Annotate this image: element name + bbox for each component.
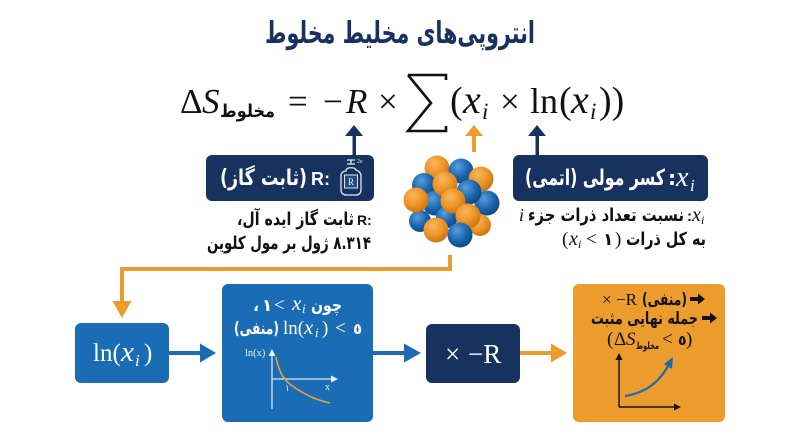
text: ln explanation (234, 291, 362, 340)
text: result: مخلوط (636, 341, 659, 352)
text: R description: ثابت گاز ایده آل، (237, 207, 354, 230)
arrow: particles to formula (465, 125, 483, 152)
label: R gas constant: (ثابت گاز) (220, 164, 307, 191)
formula: × (500, 82, 520, 121)
text: result: جمله نهایی مثبت (591, 309, 698, 329)
label: mole fraction (525, 162, 695, 195)
text: mole fraction description: به کل ذرات (626, 229, 706, 250)
text: R description: R: (357, 212, 372, 228)
formula: x (570, 77, 589, 122)
text: result: < (662, 329, 673, 350)
panel: ln explanation (222, 284, 373, 422)
text: result: Δ (614, 329, 626, 350)
text: ln explanation: ٥ (353, 320, 362, 338)
text: ln explanation: ) (322, 318, 328, 339)
arrow: -R to result (520, 344, 567, 362)
arrow: explanation to -R (373, 344, 421, 362)
formula: مخلوط (220, 101, 275, 122)
text: ln explanation: ln( (283, 318, 304, 339)
formula: Δ (180, 82, 203, 121)
text: mole fraction description: i (701, 213, 704, 227)
chart: rising curve (616, 353, 681, 410)
text: result: (منفی) (642, 290, 687, 310)
label: ln(xi): ln( (93, 340, 121, 367)
formula: i (482, 99, 488, 124)
text: ln explanation: x (303, 315, 314, 339)
text: ln explanation: (منفی) (234, 319, 279, 339)
text: mole fraction description: < (586, 229, 597, 250)
text: ln explanation: < (335, 318, 346, 339)
label: ln(xi): x (120, 336, 134, 368)
label: R gas constant: R: (311, 169, 330, 189)
arrow: xi to formula (528, 125, 546, 156)
icon: gas cylinder: R (348, 177, 354, 187)
text: result (591, 290, 717, 352)
text: mole fraction description: ( (562, 229, 568, 250)
chart: ln curve (245, 348, 338, 409)
formula: = (288, 82, 308, 121)
label: mole fraction: i (690, 176, 695, 195)
text: mole fraction description: i (578, 237, 581, 251)
label: mole fraction: : (668, 166, 676, 190)
label: ln(xi): ) (144, 340, 152, 367)
label: times -R: −R (468, 339, 501, 369)
chart: ln curve: ln(x) (245, 348, 266, 359)
formula: × (378, 82, 398, 121)
formula: i (590, 99, 596, 124)
formula: )) (599, 80, 624, 122)
formula (180, 75, 624, 131)
label: mole fraction: x (675, 162, 689, 193)
chart: ln curve: ۱ (285, 383, 290, 393)
arrow: particles to ln box (112, 255, 450, 318)
formula: S (202, 82, 220, 121)
text: ln explanation: ، (253, 296, 259, 315)
panel: mole fraction (513, 155, 708, 201)
formula: ( (559, 80, 572, 122)
text: mole fraction description: ) (615, 229, 621, 250)
text: result: ٥ (678, 333, 687, 349)
label: ln(xi) (93, 336, 152, 370)
text: mole fraction description: ۱ (603, 230, 613, 250)
text: mole fraction description (519, 204, 706, 251)
text: mole fraction description: i (519, 205, 524, 225)
text: result: ) (686, 329, 692, 350)
text: result: ( (607, 329, 613, 350)
formula: − (323, 82, 343, 121)
text: ln explanation: ۱ (262, 296, 272, 316)
formula: ln (530, 81, 558, 121)
label: mole fraction: کسر مولی (اتمی) (525, 166, 665, 191)
panel: result (573, 284, 725, 422)
panel: ln(xi) box (75, 323, 169, 383)
icon: gas cylinder: 2e (357, 159, 363, 165)
formula: x (462, 77, 481, 122)
title: انتروپی‌های مخلیط مخلوط (265, 16, 535, 51)
text: result: × (602, 290, 612, 309)
arrow: ln to explanation (169, 344, 216, 362)
icon: particle cluster (404, 156, 500, 248)
text: ln explanation: i (302, 301, 306, 316)
panel: gas constant (206, 155, 374, 201)
text: mole fraction description: x (568, 228, 578, 250)
chart: ln curve: x (325, 382, 330, 393)
formula: R (345, 82, 367, 121)
label: times -R (445, 339, 501, 369)
formula: ( (450, 80, 463, 122)
arrow: R to formula (345, 125, 363, 156)
text: ln explanation: i (315, 325, 319, 340)
label: times -R: × (445, 339, 460, 369)
text: mole fraction description: : (687, 208, 692, 225)
text: mole fraction description: نسبت تعداد ذرات جزء (528, 205, 684, 226)
text: result: −R (616, 290, 638, 309)
panel: times -R box (426, 324, 520, 383)
text: ln explanation: x (291, 291, 302, 315)
text: R description (207, 207, 372, 254)
text: ln explanation: چون (311, 296, 342, 316)
icon: gas cylinder (341, 159, 363, 195)
text: mole fraction description: x (691, 204, 701, 226)
text: ln explanation: < (274, 295, 285, 316)
text: R description: ۸.۳۱۴ ژول بر مول کلوین (207, 233, 371, 254)
label: ln(xi): i (135, 351, 140, 370)
text: result: S (626, 329, 636, 350)
